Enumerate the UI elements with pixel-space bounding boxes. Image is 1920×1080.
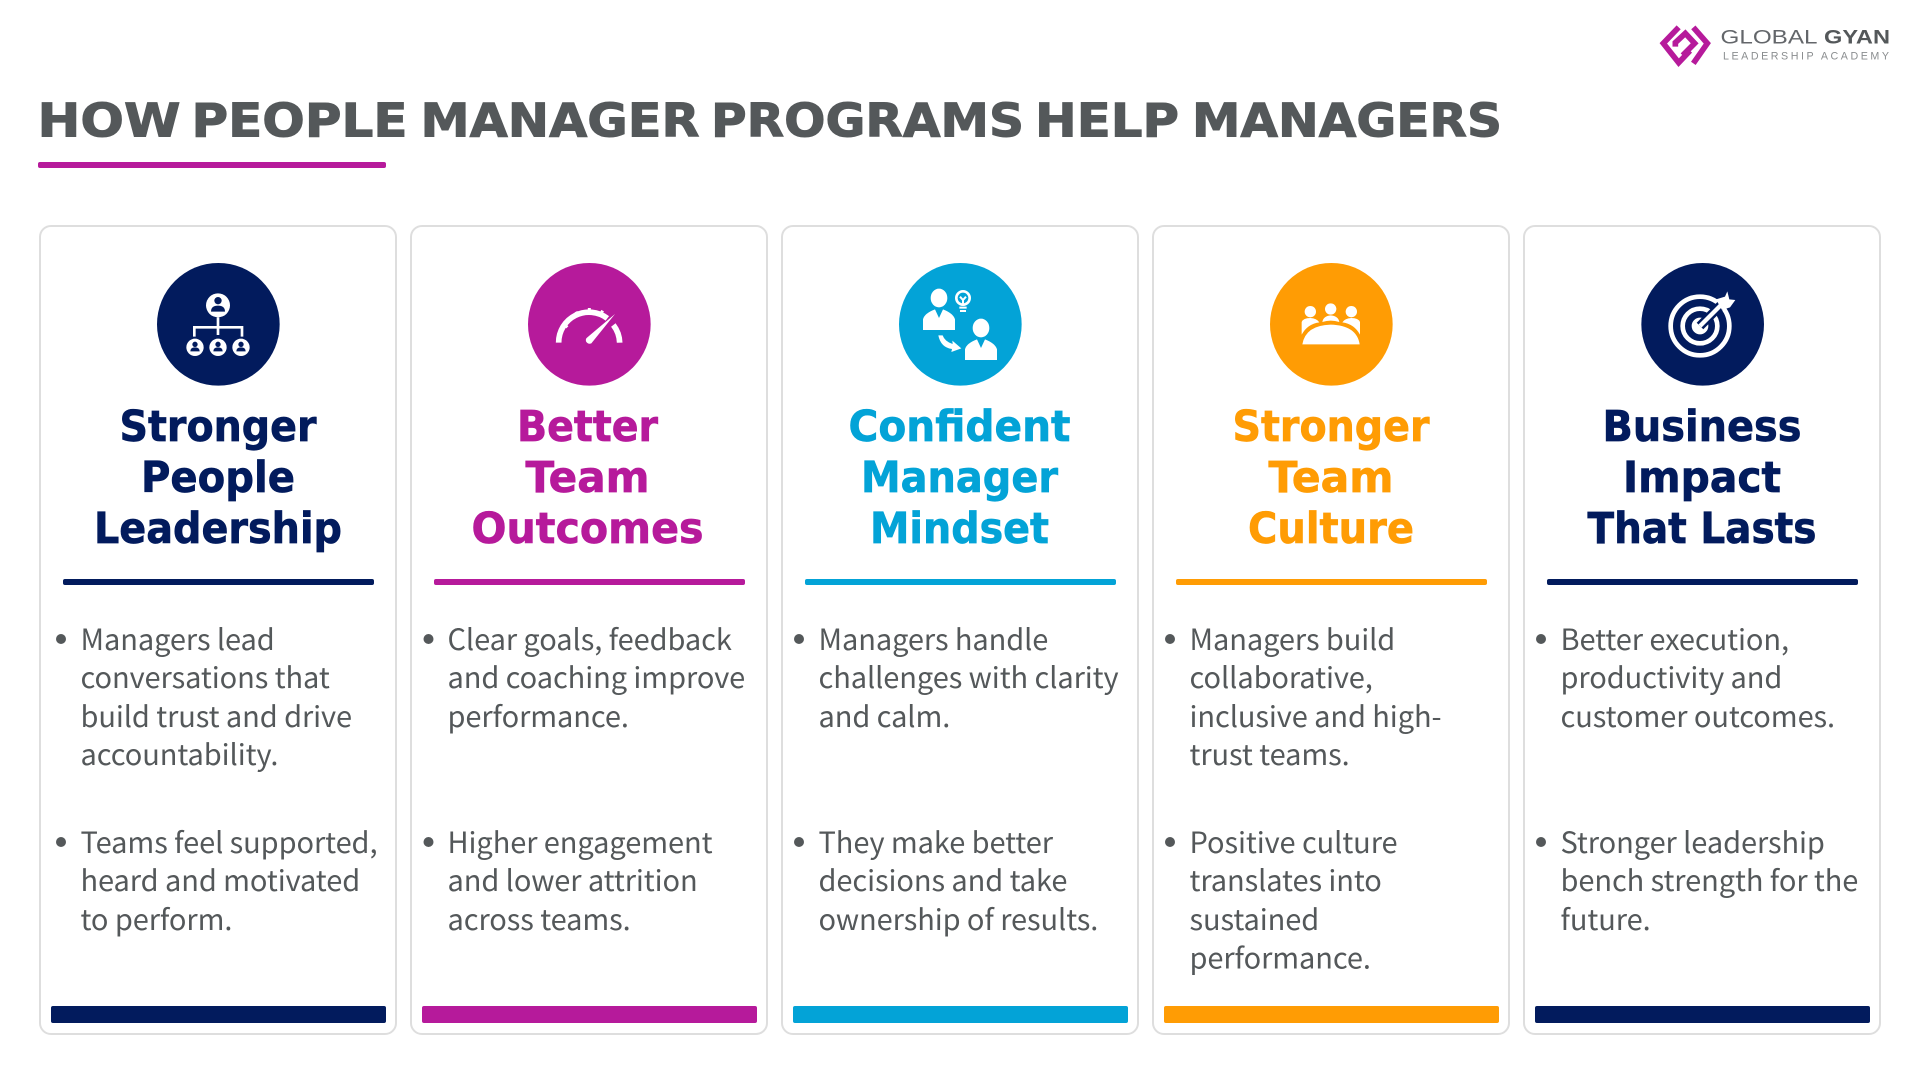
bullets: to perform. (80, 897, 232, 939)
divider (434, 579, 745, 585)
icon: org chart (157, 263, 280, 386)
heading (1232, 402, 1430, 554)
bullets: They make better (818, 820, 1054, 862)
bullets (1536, 617, 1858, 939)
bullets: Better execution, (1560, 617, 1789, 659)
footer bar (422, 1006, 757, 1023)
heading: Mindset (870, 504, 1049, 554)
panel: Business Impact That Lasts (1524, 226, 1880, 1034)
divider (63, 579, 374, 585)
title underline (38, 162, 386, 168)
bullets: collaborative, (1190, 655, 1373, 697)
heading: Leadership (94, 504, 342, 554)
bullets: performance. (448, 694, 629, 736)
bullets: Managers lead (80, 617, 275, 659)
title: MANAGER (420, 94, 700, 148)
heading: Team (1268, 453, 1394, 503)
icon: target with arrow (1641, 263, 1764, 386)
panel: Better Team Outcomes (411, 226, 767, 1034)
heading: Culture (1248, 504, 1414, 554)
heading: Impact (1623, 453, 1781, 503)
bullets: Managers handle (818, 617, 1048, 659)
divider (1176, 579, 1487, 585)
logo: Global Gyan Leadership Academy (1663, 27, 1890, 63)
title: MANAGERS (1192, 94, 1502, 148)
panel: Confident Manager Mindset (782, 226, 1138, 1034)
bullets: customer outcomes. (1560, 694, 1835, 736)
bullets: Teams feel supported, (80, 820, 377, 862)
heading: People (141, 453, 295, 503)
title: HELP (1035, 94, 1179, 148)
title: PEOPLE (192, 94, 408, 148)
heading: Outcomes (472, 504, 704, 554)
title (38, 94, 1502, 148)
bullets (1165, 617, 1441, 978)
bullets: and coaching improve (448, 655, 745, 697)
bullets: sustained (1190, 897, 1319, 939)
bullets: and calm. (818, 694, 950, 736)
footer bar (793, 1006, 1128, 1023)
divider (805, 579, 1116, 585)
heading (848, 402, 1070, 554)
bullets: productivity and (1560, 655, 1782, 697)
bullets: future. (1560, 897, 1651, 939)
heading: That Lasts (1588, 504, 1816, 554)
bullets (56, 617, 377, 939)
bullets: performance. (1190, 936, 1371, 978)
bullets: decisions and take (818, 858, 1067, 900)
bullets (424, 617, 745, 939)
icon: people sharing an idea (899, 263, 1022, 386)
bullets: across teams. (448, 897, 631, 939)
footer bar (1164, 1006, 1499, 1023)
logo: Global Gyan Leadership Academy: GYAN (1824, 28, 1890, 49)
heading: Confident (848, 402, 1070, 452)
bullets: ownership of results. (818, 897, 1098, 939)
bullets: Positive culture (1190, 820, 1398, 862)
heading (1588, 402, 1816, 554)
bullets: heard and motivated (80, 858, 360, 900)
bullets: and lower attrition (448, 858, 698, 900)
bullets: accountability. (80, 732, 278, 774)
panel: Stronger People Leadership (40, 226, 396, 1034)
heading: Stronger (120, 402, 317, 452)
heading: Better (517, 402, 659, 452)
footer bar (51, 1006, 386, 1023)
title: PROGRAMS (711, 94, 1024, 148)
bullets: translates into (1190, 858, 1382, 900)
bullets: inclusive and high- (1190, 694, 1441, 736)
bullets: Higher engagement (448, 820, 713, 862)
bullets: challenges with clarity (818, 655, 1119, 697)
icon: speedometer (528, 263, 651, 386)
heading: Stronger (1232, 402, 1430, 452)
bullets: build trust and drive (80, 694, 352, 736)
bullets: bench strength for the (1560, 858, 1858, 900)
bullets: Managers build (1190, 617, 1395, 659)
bullets: conversations that (80, 655, 330, 697)
footer bar (1535, 1006, 1870, 1023)
divider (1547, 579, 1858, 585)
bullets: Stronger leadership (1560, 820, 1825, 862)
panel: Stronger Team Culture (1153, 226, 1509, 1034)
logo: Global Gyan Leadership Academy: GLOBAL (1720, 28, 1818, 49)
icon: team around table (1270, 263, 1393, 386)
heading (94, 402, 342, 554)
title: HOW (38, 94, 180, 148)
logo: Global Gyan Leadership Academy: LEADERSHIP ACADEMY (1723, 50, 1889, 62)
heading (472, 402, 704, 554)
bullets: Clear goals, feedback (448, 617, 732, 659)
heading: Team (526, 453, 650, 503)
bullets (794, 617, 1119, 939)
bullets: trust teams. (1190, 732, 1350, 774)
heading: Business (1602, 402, 1802, 452)
heading: Manager (861, 453, 1059, 503)
